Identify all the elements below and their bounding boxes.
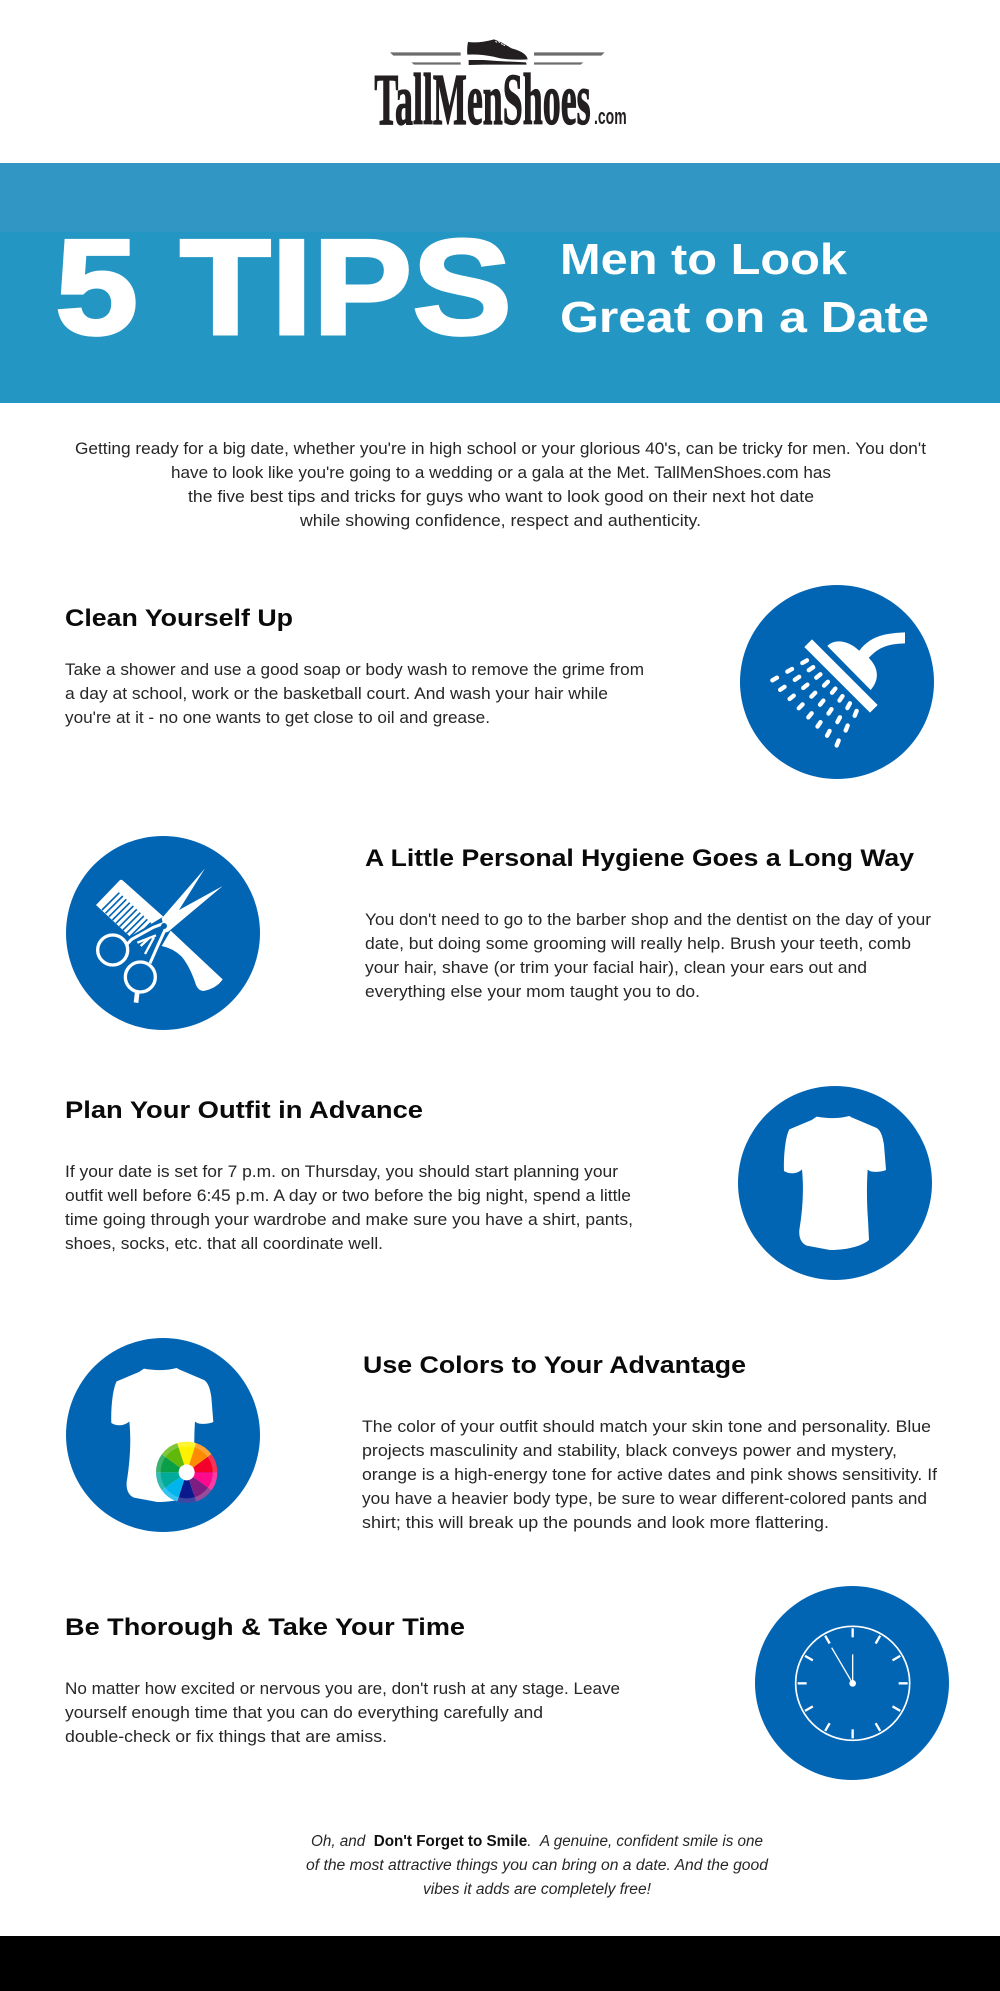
intro text: while showing confidence, respect and authenticity. xyxy=(299,512,701,530)
intro text xyxy=(75,440,926,530)
closing note: vibes it adds are completely free! xyxy=(423,1881,652,1898)
body text: The color of your outfit should match your skin tone and personality. Blue xyxy=(362,1418,931,1436)
closing note xyxy=(306,1833,769,1898)
body text: projects masculinity and stability, black conveys power and mystery, xyxy=(362,1442,897,1460)
heading: Use Colors to Your Advantage xyxy=(363,1352,746,1379)
body text: double-check or fix things that are amiss. xyxy=(65,1728,387,1746)
banner title: 5 TIPS: 5 TIPS xyxy=(55,211,512,363)
body text: shoes, socks, etc. that all coordinate well. xyxy=(65,1235,383,1253)
closing note: Oh, and Don't Forget to Smile. A genuine, confident smile is one xyxy=(311,1833,763,1850)
body text: everything else your mom taught you to do. xyxy=(365,983,700,1001)
heading: Plan Your Outfit in Advance xyxy=(65,1097,423,1124)
body text: Take a shower and use a good soap or body wash to remove the grime from xyxy=(65,661,644,679)
panel: tip 2 personal hygiene xyxy=(66,836,932,1030)
body text: yourself enough time that you can do everything carefully and xyxy=(65,1704,543,1722)
body text: you're at it - no one wants to get close to oil and grease. xyxy=(65,709,490,727)
body text: you have a heavier body type, be sure to wear different-colored pants and xyxy=(362,1490,927,1508)
panel: tip 1 clean yourself up xyxy=(65,585,934,779)
heading: Clean Yourself Up xyxy=(65,605,293,632)
banner subtitle xyxy=(560,235,929,342)
banner xyxy=(0,163,1000,403)
body text: No matter how excited or nervous you are, don't rush at any stage. Leave xyxy=(65,1680,620,1698)
panel: tip 4 use colors xyxy=(66,1338,937,1532)
icon: shower xyxy=(740,585,934,779)
body text xyxy=(65,1163,633,1253)
body text: date, but doing some grooming will really help. Brush your teeth, comb xyxy=(365,935,911,953)
body text: outfit well before 6:45 p.m. A day or two before the big night, spend a little xyxy=(65,1187,631,1205)
body text: If your date is set for 7 p.m. on Thursday, you should start planning your xyxy=(65,1163,619,1181)
icon: comb and scissors xyxy=(66,836,260,1030)
icon: t-shirt xyxy=(738,1086,932,1280)
body text xyxy=(65,1680,620,1746)
body text: your hair, shave (or trim your facial hair), clean your ears out and xyxy=(365,959,867,977)
logo: TallMenShoes.com: TallMenShoes xyxy=(374,59,591,140)
body text: You don't need to go to the barber shop and the dentist on the day of your xyxy=(365,911,932,929)
banner subtitle: Great on a Date xyxy=(560,293,929,342)
body text: a day at school, work or the basketball court. And wash your hair while xyxy=(65,685,608,703)
icon: clock xyxy=(755,1586,949,1780)
body text xyxy=(365,911,932,1001)
closing note: of the most attractive things you can bring on a date. And the good xyxy=(306,1857,769,1874)
intro text: the five best tips and tricks for guys who want to look good on their next hot date xyxy=(188,488,814,506)
banner subtitle: Men to Look xyxy=(560,235,848,284)
intro text: Getting ready for a big date, whether you're in high school or your glorious 40's, can be tricky for men. You don't xyxy=(75,440,926,458)
panel: tip 3 plan your outfit xyxy=(65,1086,932,1280)
body text xyxy=(65,661,644,727)
logo: TallMenShoes.com xyxy=(374,39,627,140)
footer bar xyxy=(0,1936,1000,1991)
body text xyxy=(362,1418,937,1532)
panel: tip 5 take your time xyxy=(65,1586,949,1780)
body text: orange is a high-energy tone for active dates and pink shows sensitivity. If xyxy=(362,1466,937,1484)
body text: shirt; this will break up the pounds and look more flattering. xyxy=(362,1514,829,1532)
icon: t-shirt with color wheel xyxy=(66,1338,260,1532)
heading: Be Thorough & Take Your Time xyxy=(65,1614,465,1641)
heading: A Little Personal Hygiene Goes a Long Way xyxy=(365,845,915,872)
body text: time going through your wardrobe and make sure you have a shirt, pants, xyxy=(65,1211,633,1229)
intro text: have to look like you're going to a wedding or a gala at the Met. TallMenShoes.com has xyxy=(171,464,831,482)
logo: TallMenShoes.com: .com xyxy=(594,104,627,129)
